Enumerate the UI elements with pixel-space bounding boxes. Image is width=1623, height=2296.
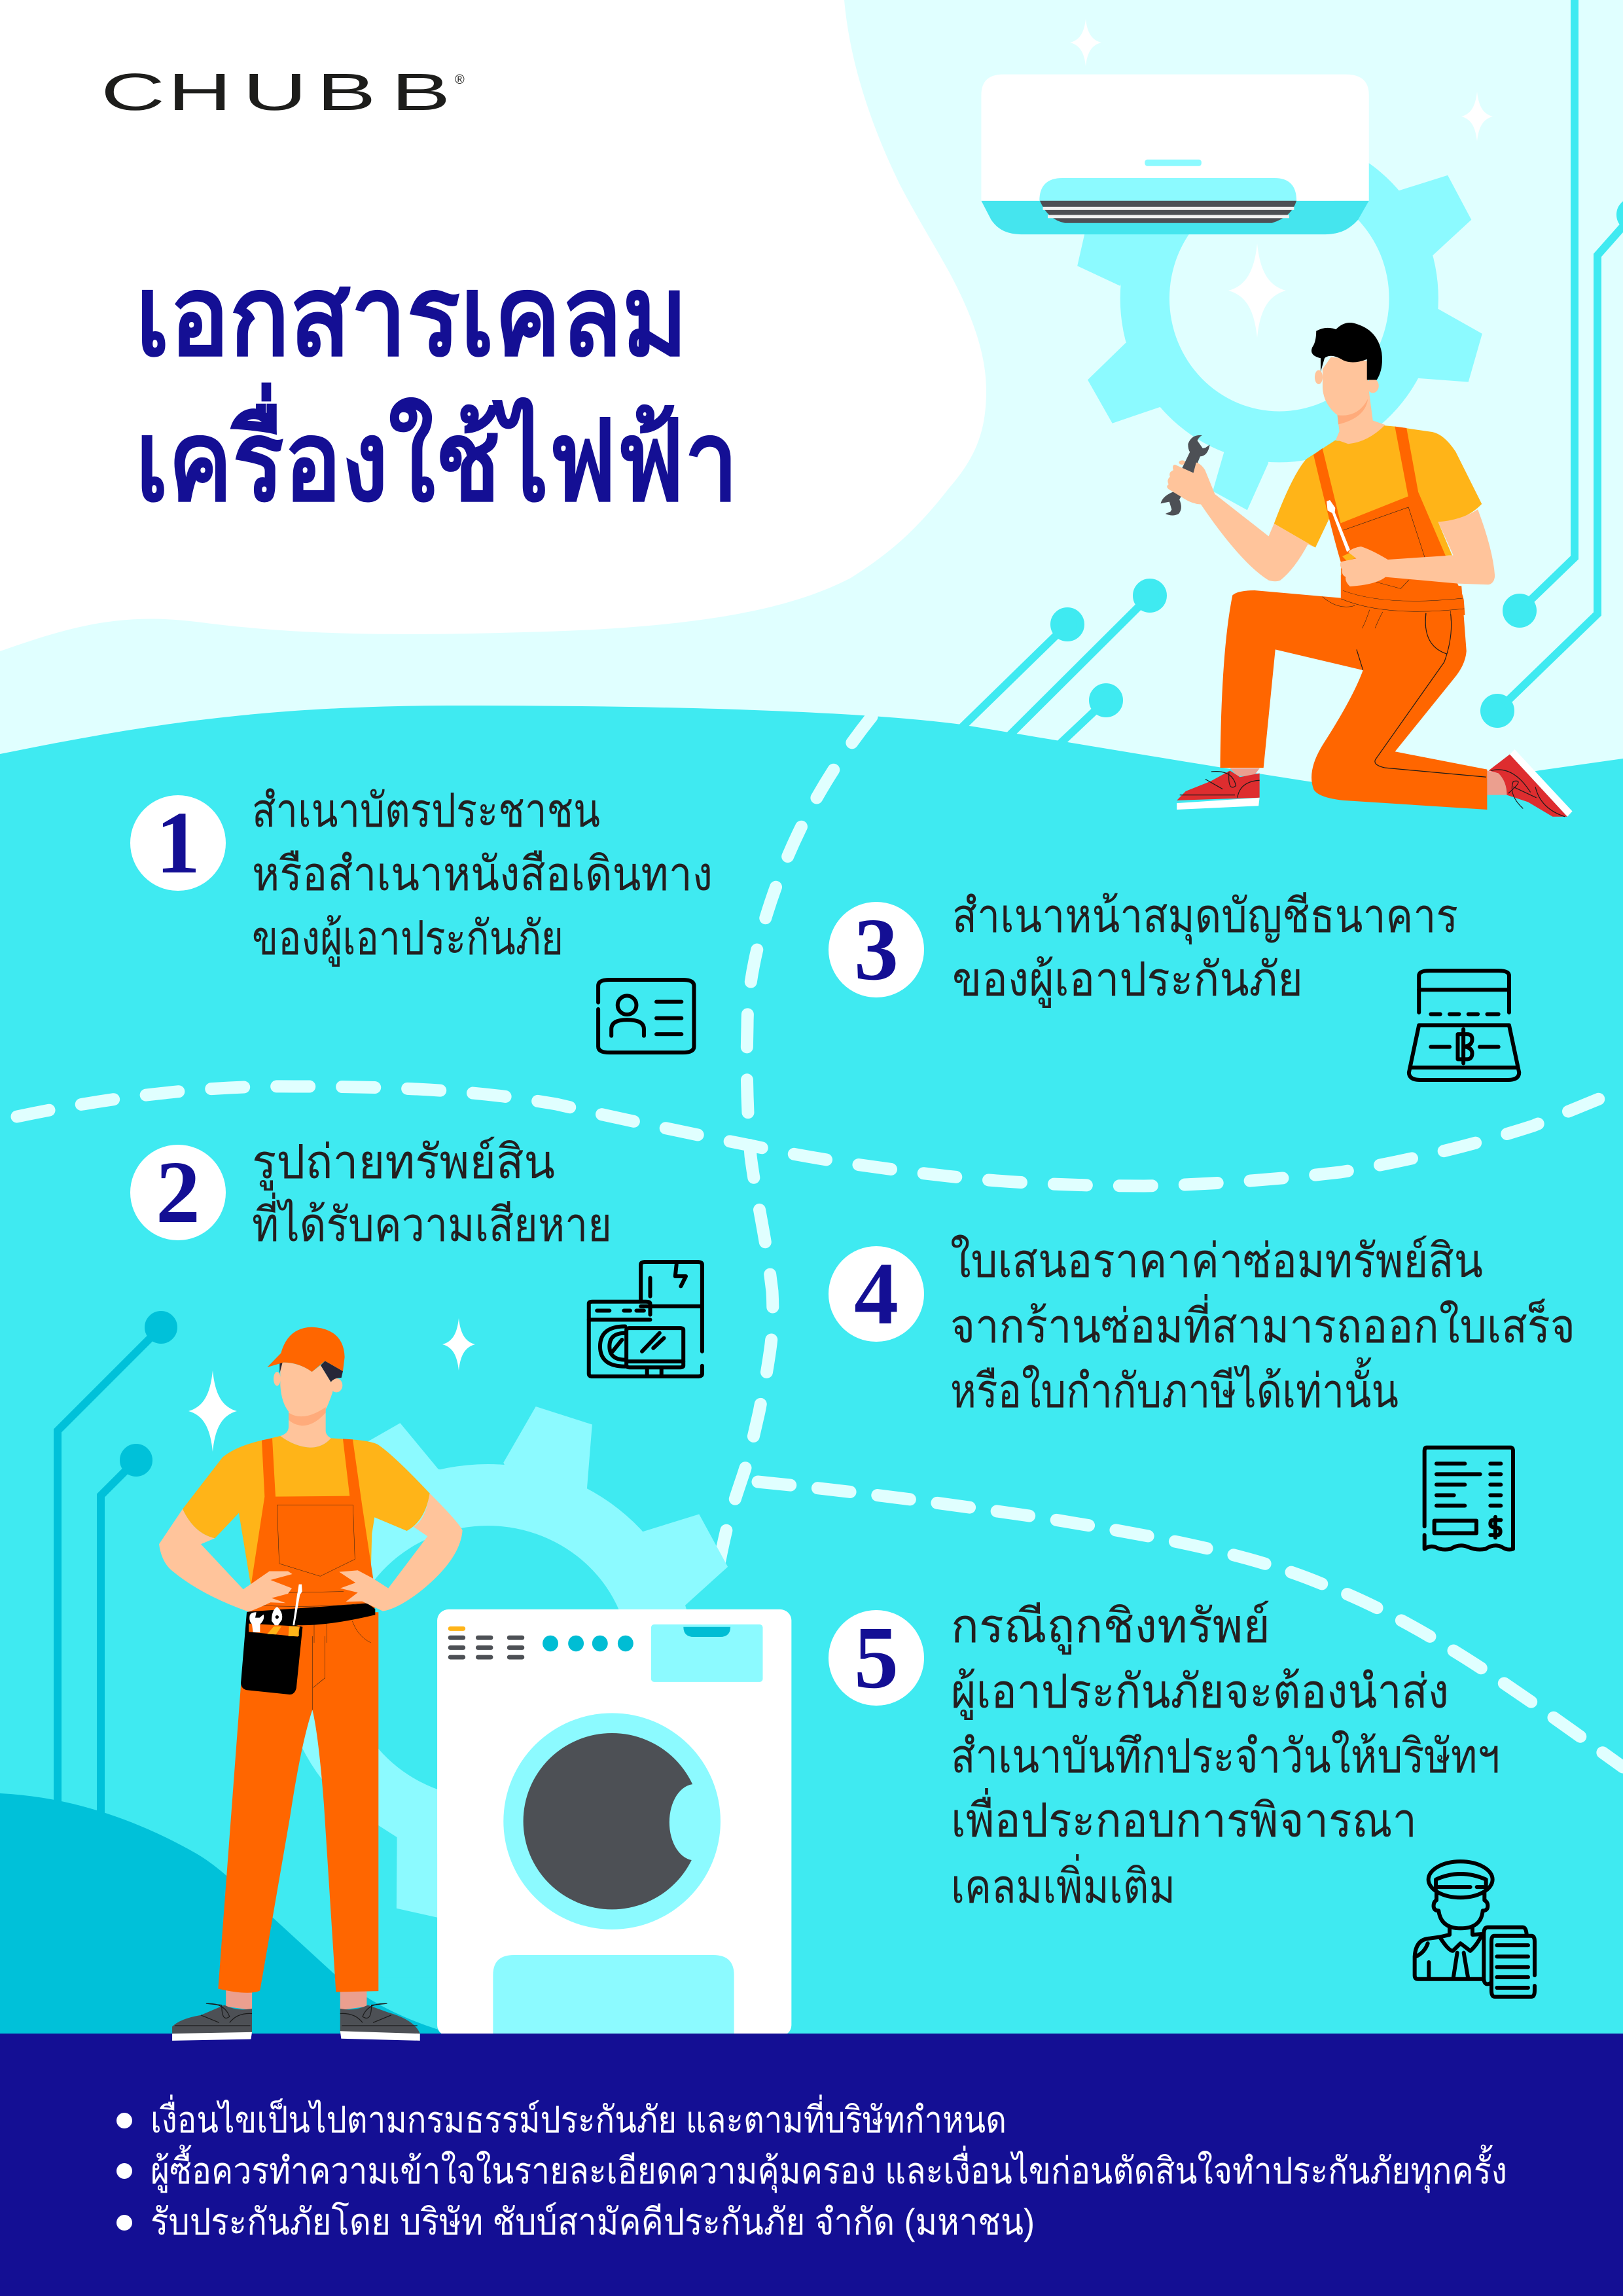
footer band — [0, 2034, 1623, 2296]
icon: id card — [598, 980, 694, 1052]
item 3: ของผู้เอาประกันภัย — [952, 954, 1303, 1008]
gear: bottom — [251, 1407, 728, 1977]
dashed path: vertical — [717, 717, 872, 1573]
item 2: รูปถ่ายทรัพย์สิน — [252, 1136, 555, 1191]
item 4: หรือใบกำกับภาษีได้เท่านั้น — [950, 1357, 1399, 1418]
gear: top — [1077, 135, 1482, 510]
item 1: 1 — [156, 794, 200, 892]
footer: bullets and text: รับประกันภัยโดย บริษัท ชับบ์สามัคคีประกันภัย จำกัด (มหาชน) — [151, 2201, 1035, 2242]
footer: bullets and text — [116, 2094, 1507, 2242]
icon: receipt — [1425, 1448, 1513, 1550]
item 4: 4 — [854, 1245, 899, 1343]
arms, hands, tools, head — [159, 1327, 463, 1637]
upper body — [1161, 425, 1495, 628]
footer: bullets and text: เงื่อนไขเป็นไปตามกรมธรรม์ประกันภัย และตามที่บริษัทกำหนด — [151, 2094, 1007, 2140]
title: เอกสารเคลม — [135, 253, 688, 379]
item 5: สำเนาบันทึกประจำวันให้บริษัทฯ — [951, 1730, 1500, 1783]
title: เครื่องใช้ไฟฟ้า — [135, 382, 738, 524]
dashed path: lower diagonal — [758, 1482, 1623, 1767]
sparkles: top — [1070, 19, 1493, 338]
item 5 — [829, 1600, 1500, 1913]
icon: police officer with documents — [1415, 1861, 1535, 1997]
circuit lines: bottom left — [58, 1315, 173, 1820]
item 4 — [829, 1234, 1575, 1418]
upper body — [183, 1436, 430, 1643]
circuit lines: top right — [961, 0, 1623, 744]
technician: kneeling — [1161, 323, 1573, 817]
item 1: ของผู้เอาประกันภัย — [252, 912, 563, 967]
tool pouch — [241, 1612, 302, 1695]
item 1: หรือสำเนาหนังสือเดินทาง — [252, 848, 713, 901]
item 2: 2 — [156, 1143, 200, 1242]
item 2: ที่ได้รับความเสียหาย — [252, 1193, 612, 1251]
item 1: สำเนาบัตรประชาชน — [252, 785, 600, 837]
item 5: 5 — [854, 1609, 899, 1707]
technician: standing — [159, 1327, 463, 2041]
icon: bank book — [1409, 971, 1519, 1080]
item 3 — [829, 890, 1458, 1008]
item 4: ใบเสนอราคาค่าซ่อมทรัพย์สิน — [950, 1234, 1483, 1287]
title — [135, 253, 738, 524]
item 1 — [130, 785, 713, 967]
legs and shoes — [1177, 575, 1573, 817]
washing machine — [437, 1609, 791, 2036]
white background blob — [0, 0, 986, 651]
item 4: จากร้านซ่อมที่สามารถออกใบเสร็จ — [950, 1294, 1575, 1353]
dashed path: horizontal top — [17, 1086, 1623, 1186]
head and hair — [1311, 323, 1385, 444]
item 3: สำเนาหน้าสมุดบัญชีธนาคาร — [952, 890, 1458, 944]
item 5: เพื่อประกอบการพิจารณา — [951, 1788, 1417, 1847]
item 5: ผู้เอาประกันภัยจะต้องนำส่ง — [951, 1666, 1449, 1720]
item 5: กรณีถูกชิงทรัพย์ — [951, 1600, 1270, 1655]
logo: Chubb: CHUBB — [101, 63, 450, 121]
icon: appliances — [589, 1262, 702, 1376]
item 5: เคลมเพิ่มเติม — [951, 1854, 1175, 1913]
sparkles: bottom — [188, 1318, 475, 1452]
item 2 — [130, 1136, 612, 1251]
legs and shoes — [172, 1990, 420, 2041]
logo: Chubb: ® — [455, 73, 465, 87]
item 3: 3 — [854, 901, 899, 999]
trousers — [218, 1612, 378, 1993]
air conditioner — [981, 75, 1369, 234]
main cyan wave background — [0, 706, 1623, 2296]
teal hill — [0, 1793, 458, 2036]
